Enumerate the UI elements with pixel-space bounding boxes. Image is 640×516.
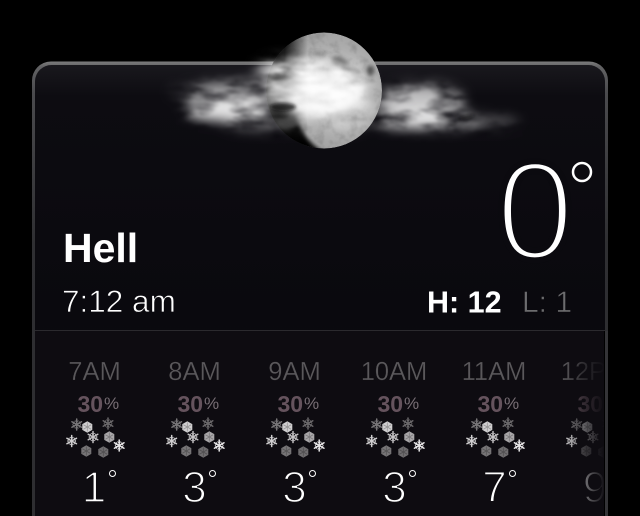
panel: weather card (32, 61, 608, 516)
hour: 9AM: % (304, 394, 319, 413)
hour: 10AM: 10AM (361, 358, 427, 386)
hour: 12PM, clipped: 9 (583, 463, 607, 512)
hourly forecast (67, 358, 627, 512)
hour: 8AM: 30 (178, 391, 203, 417)
hour: 11AM: 7 (482, 463, 507, 512)
icon: moon behind clouds (170, 32, 519, 153)
hour: 7AM: 7AM (68, 358, 121, 386)
cloud over moon on the left (170, 58, 375, 130)
degree ring (573, 163, 591, 181)
soft glow under clouds (188, 68, 456, 120)
right edge fade (563, 331, 605, 516)
hour: 7AM: 1 (82, 463, 106, 512)
divider (35, 330, 605, 331)
hour: 10AM: 3 (382, 463, 407, 512)
hour: 8AM (167, 358, 224, 512)
city name: Hell (63, 225, 138, 271)
hour: 8AM: 8AM (168, 358, 221, 386)
low temperature: L: 1 (522, 286, 572, 319)
hour: 10AM: % (404, 394, 419, 413)
hour: 12PM, clipped: % (604, 394, 619, 413)
current temperature (496, 132, 591, 289)
hour: 9AM: 3 (282, 463, 307, 512)
hour: 9AM (267, 358, 324, 512)
hour: 11AM: 11AM (462, 358, 526, 386)
hour: 10AM (361, 358, 427, 512)
big zero: 0 (496, 132, 574, 289)
hour: 8AM: 3 (182, 463, 207, 512)
hour: 12PM, clipped (561, 358, 627, 512)
moon disc (260, 32, 382, 153)
hour: 7AM: % (104, 394, 119, 413)
hour: 9AM: 30 (278, 391, 303, 417)
high temperature: H: 12 (427, 286, 502, 320)
hour: 12PM, clipped: 12PM (561, 358, 627, 386)
hour: 12PM, clipped: 30 (578, 391, 603, 417)
hour: 7AM: 30 (78, 391, 103, 417)
hour: 10AM: 30 (378, 391, 403, 417)
hour: 11AM (462, 358, 526, 512)
hour: 11AM: 30 (478, 391, 503, 417)
hour: 8AM: % (204, 394, 219, 413)
local time: 7:12 am (62, 283, 176, 319)
hour: 7AM (67, 358, 124, 512)
hour: 11AM: % (504, 394, 519, 413)
cloud behind moon on the right (371, 84, 519, 129)
hour: 9AM: 9AM (268, 358, 321, 386)
